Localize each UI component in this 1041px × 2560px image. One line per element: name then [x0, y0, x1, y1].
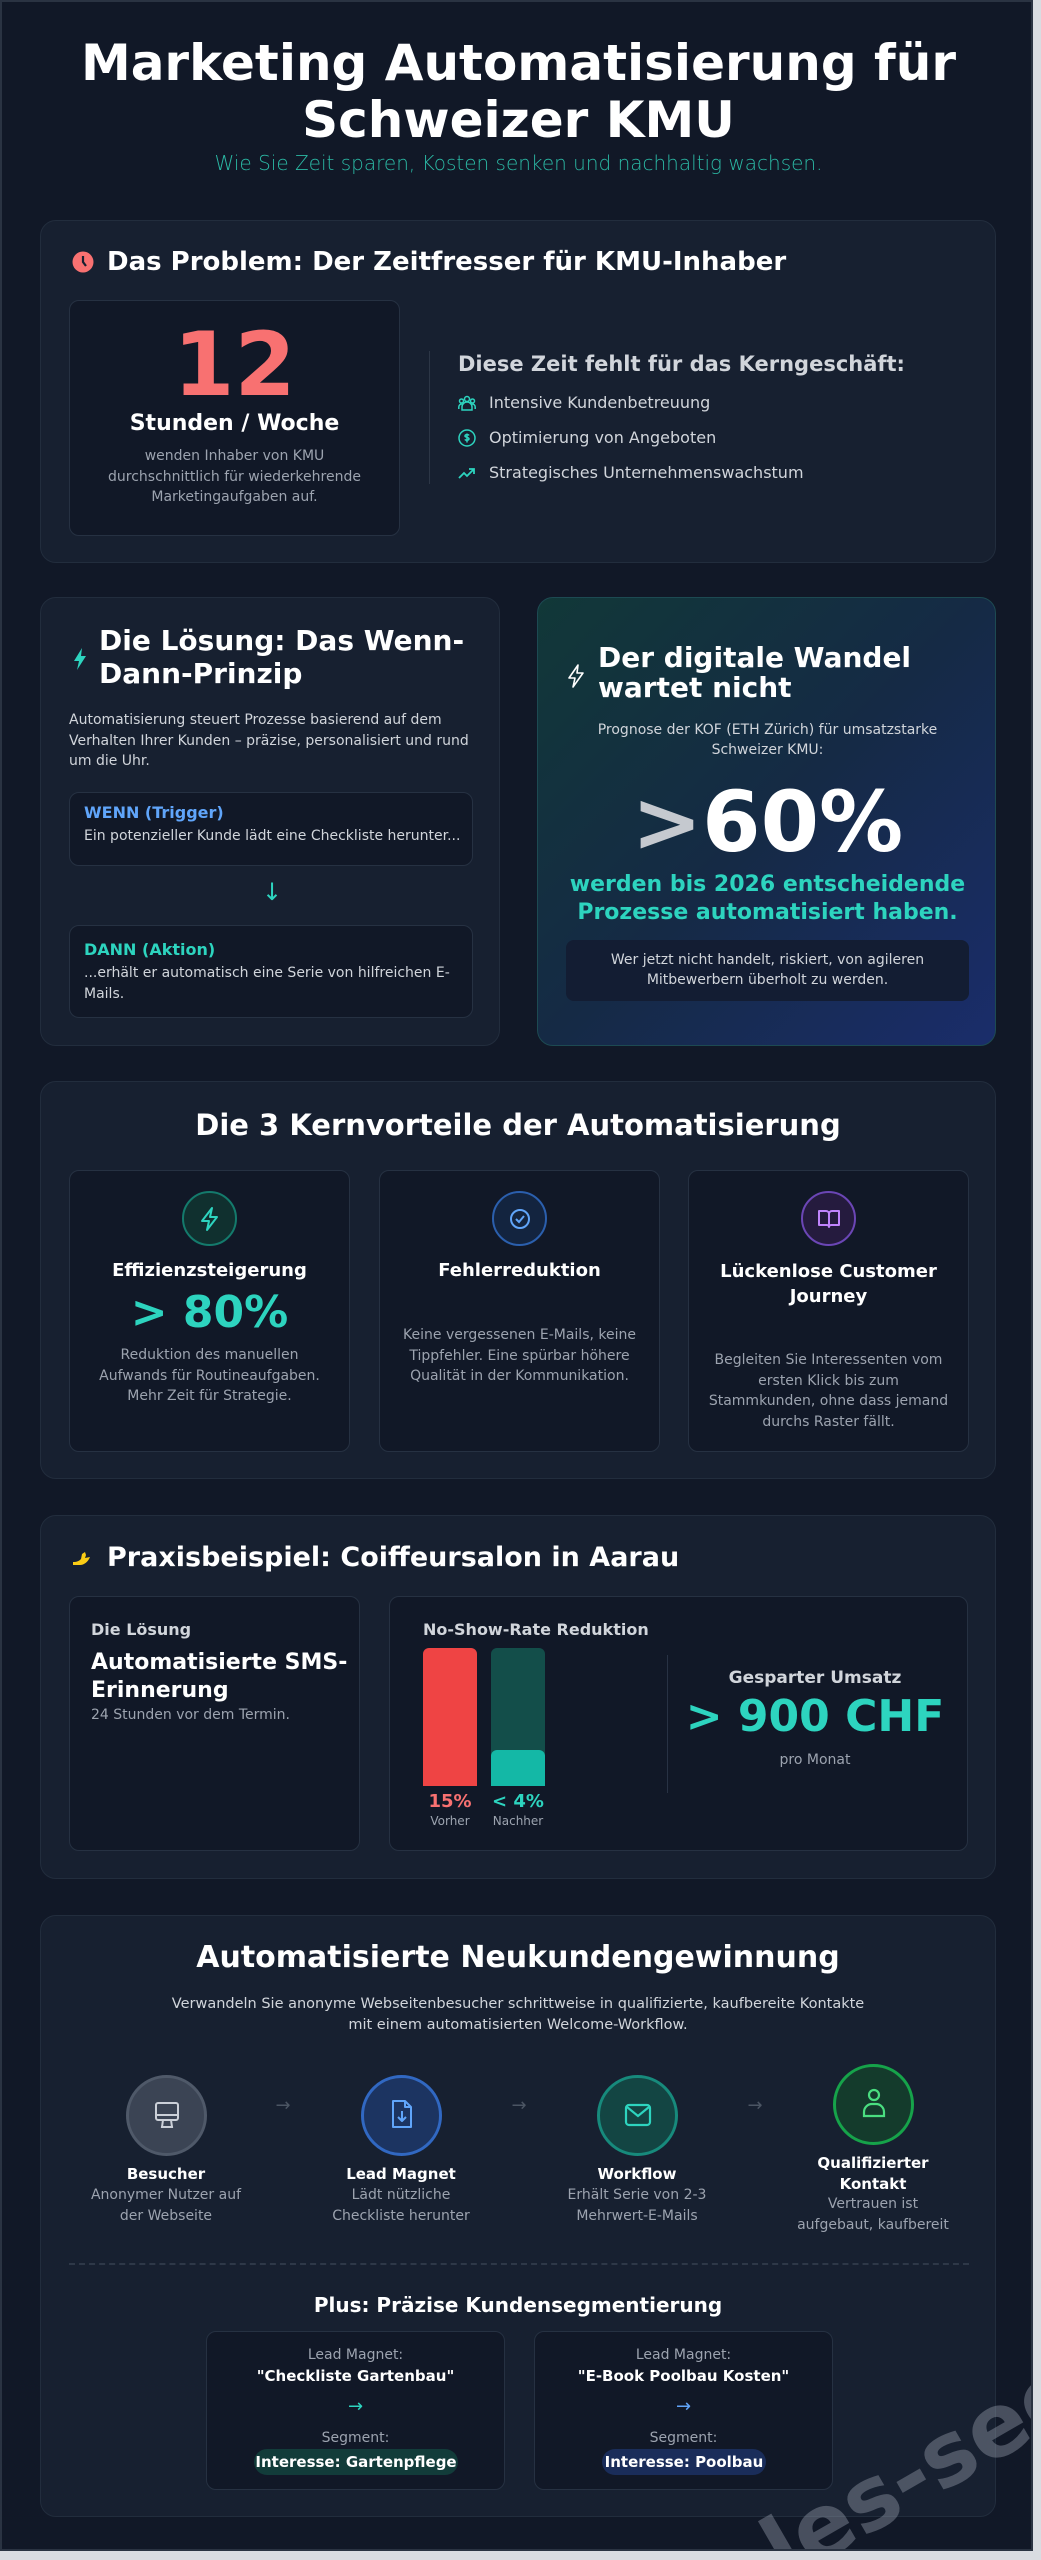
heading: solution: Die Lösung: Das Wenn-Dann-Prinzip	[99, 624, 464, 690]
box: chart and savings: No-Show-Rate Reduktion	[423, 1620, 649, 1639]
icon: check circle	[492, 1191, 547, 1246]
heading: case study: Praxisbeispiel: Coiffeursalon in Aarau	[107, 1542, 679, 1573]
arrow: →	[275, 2095, 291, 2116]
text: stat description	[570, 872, 965, 925]
icon: clock	[72, 252, 94, 272]
box: segment garden: Lead Magnet:	[308, 2347, 403, 2363]
icon: bolt	[74, 648, 86, 670]
step: lead magnet: Lead Magnet	[346, 2165, 456, 2183]
text: intro: mit einem automatisierten Welcome-Workflow.	[348, 2017, 688, 2033]
box: DANN action: DANN (Aktion)	[84, 940, 215, 959]
icon: bolt outline	[568, 664, 584, 688]
bar chart: 15%	[428, 1791, 472, 1812]
card: customer journey: Journey	[790, 1286, 867, 1307]
box: WENN trigger	[69, 792, 473, 866]
arrow: →	[747, 2095, 763, 2116]
text: forecast source: Schweizer KMU:	[712, 742, 823, 758]
box: segment garden: "Checkliste Gartenbau"	[257, 2367, 454, 2385]
card: error reduction: Tippfehler. Eine spürbar höhere	[409, 1348, 630, 1364]
text: explanation: um die Uhr.	[69, 753, 150, 769]
card: efficiency: Effizienzsteigerung	[112, 1260, 307, 1281]
panel: digital change	[537, 597, 996, 1046]
box: WENN trigger: WENN (Trigger)	[84, 803, 224, 822]
description: wenden Inhaber von KMU durchschnittlich für wiederkehrende Marketingaufgaben auf.	[108, 448, 361, 505]
box: chart and savings	[389, 1596, 968, 1851]
step: lead magnet: Checkliste herunter	[332, 2208, 470, 2224]
card: customer journey	[688, 1170, 969, 1452]
box: DANN action	[69, 925, 473, 1018]
callout: warning	[566, 940, 969, 1001]
bar chart: Nachher	[493, 1814, 543, 1828]
box: segment garden: Segment:	[322, 2430, 389, 2446]
panel: problem	[40, 220, 996, 563]
icon: bolt circle	[182, 1191, 237, 1246]
box: segment pool: Interesse: Poolbau	[605, 2453, 763, 2471]
card: error reduction: Keine vergessenen E-Mails, keine	[403, 1327, 636, 1343]
box: segment pool: "E-Book Poolbau Kosten"	[578, 2367, 789, 2385]
unit: Stunden / Woche	[130, 411, 339, 436]
card: customer journey: Stammkunden, ohne dass jemand	[709, 1393, 948, 1409]
arrow: down: ↓	[262, 878, 282, 906]
item: customer care: Intensive Kundenbetreuung	[489, 393, 710, 412]
big number: 12	[173, 313, 296, 416]
box: segment pool: Segment:	[650, 2430, 717, 2446]
stat box: 12 hours	[69, 300, 400, 536]
heading: digital change	[598, 641, 911, 704]
text: forecast source	[598, 722, 937, 758]
stat: >80%: > 80%	[131, 1287, 288, 1338]
panel: solution	[40, 597, 500, 1046]
stat: saved revenue: Gesparter Umsatz	[729, 1668, 901, 1688]
arrow: →	[511, 2095, 527, 2116]
list: lost activities	[458, 393, 804, 482]
stat: saved revenue: pro Monat	[780, 1752, 850, 1768]
text: explanation: Verhalten Ihrer Kunden – präzise, personalisiert und rund	[69, 732, 469, 748]
heading: benefits: Die 3 Kernvorteile der Automatisierung	[195, 1108, 841, 1142]
panel: lead generation	[40, 1915, 996, 2517]
step: qualified contact	[797, 2064, 949, 2233]
box: segment garden	[206, 2331, 505, 2490]
box: solution	[69, 1596, 360, 1851]
text: explanation	[69, 712, 469, 769]
stat: saved revenue	[686, 1668, 944, 1768]
panel: benefits	[40, 1081, 996, 1479]
title: Schweizer KMU	[302, 91, 735, 149]
box: segment pool: Lead Magnet:	[636, 2347, 731, 2363]
box: segment pool: →	[676, 2396, 691, 2417]
card: efficiency: Mehr Zeit für Strategie.	[127, 1388, 292, 1404]
box: solution: 24 Stunden vor dem Termin.	[91, 1707, 290, 1723]
box: solution: Automatisierte SMS-Erinnerung	[91, 1650, 347, 1703]
box: segment garden: →	[348, 2396, 363, 2417]
step: qualified contact: Vertrauen ist	[828, 2196, 918, 2212]
step: workflow: Workflow	[598, 2165, 676, 2183]
text: intro	[172, 1996, 864, 2033]
card: efficiency: Reduktion des manuellen	[121, 1347, 298, 1363]
text: stat description: werden bis 2026 entscheidende	[570, 872, 965, 897]
icon: book	[801, 1191, 856, 1246]
callout: warning: Wer jetzt nicht handelt, riskiert, von agileren	[611, 952, 924, 968]
step: lead magnet: Lädt nützliche	[352, 2187, 450, 2203]
callout: warning: Mitbewerbern überholt zu werden.	[647, 972, 888, 988]
card: error reduction	[379, 1170, 660, 1452]
step: workflow: Mehrwert-E-Mails	[576, 2208, 698, 2224]
heading: segmentation: Plus: Präzise Kundensegmentierung	[314, 2293, 722, 2317]
step: visitor	[91, 2075, 242, 2224]
title: Marketing Automatisierung für	[81, 34, 956, 92]
text: explanation: Automatisierung steuert Prozesse basierend auf dem	[69, 712, 442, 728]
bar chart: Vorher	[430, 1814, 470, 1828]
stat: saved revenue: > 900 CHF	[686, 1691, 944, 1742]
heading: digital change: Der digitale Wandel	[598, 641, 911, 674]
bar chart	[423, 1648, 545, 1828]
heading: problem: Das Problem: Der Zeitfresser für KMU-Inhaber	[107, 247, 786, 277]
box: segment garden: Interesse: Gartenpflege	[255, 2453, 457, 2471]
box: segment pool	[534, 2331, 833, 2490]
card: customer journey: Lückenlose Customer	[720, 1261, 937, 1282]
step: workflow	[568, 2075, 706, 2224]
box: DANN action: ...erhält er automatisch eine Serie von hilfreichen E-Mails.	[84, 965, 450, 1002]
step: visitor: der Webseite	[120, 2208, 212, 2224]
box: solution: Die Lösung	[91, 1620, 191, 1639]
box: WENN trigger: Ein potenzieller Kunde lädt eine Checkliste herunter...	[84, 828, 460, 844]
bar chart: < 4%	[492, 1791, 544, 1812]
item: growth: Strategisches Unternehmenswachstum	[489, 463, 804, 482]
card: error reduction: Qualität in der Kommunikation.	[410, 1368, 629, 1384]
step: visitor: Anonymer Nutzer auf	[91, 2187, 241, 2203]
step: qualified contact: Kontakt	[840, 2175, 906, 2193]
heading: lead generation: Automatisierte Neukundengewinnung	[196, 1940, 840, 1975]
step: qualified contact: aufgebaut, kaufbereit	[797, 2217, 949, 2233]
card: customer journey: durchs Raster fällt.	[762, 1414, 895, 1430]
heading: digital change: wartet nicht	[598, 671, 792, 704]
step: lead magnet	[332, 2075, 470, 2224]
big stat: >60%: >60%	[632, 773, 903, 871]
panel: case study	[40, 1515, 996, 1879]
subtitle: Wie Sie Zeit sparen, Kosten senken und nachhaltig wachsen.	[215, 151, 822, 175]
card: customer journey: Begleiten Sie Interessenten vom	[715, 1352, 942, 1368]
step: visitor: Besucher	[127, 2165, 205, 2183]
step: qualified contact: Qualifizierter	[817, 2154, 929, 2172]
text: stat description: Prozesse automatisiert haben.	[577, 900, 958, 925]
step: workflow: Erhält Serie von 2-3	[568, 2187, 706, 2203]
icon: hand	[73, 1552, 90, 1565]
item: offers: Optimierung von Angeboten	[489, 428, 716, 447]
heading: core business: Diese Zeit fehlt für das Kerngeschäft:	[458, 352, 905, 376]
text: forecast source: Prognose der KOF (ETH Zürich) für umsatzstarke	[598, 722, 937, 738]
card: customer journey: ersten Klick bis zum	[758, 1373, 899, 1389]
card: efficiency	[69, 1170, 350, 1452]
text: intro: Verwandeln Sie anonyme Webseitenbesucher schrittweise in qualifizierte, kaufbereite Kontakte	[172, 1996, 864, 2012]
title	[81, 34, 956, 149]
card: efficiency: Aufwands für Routineaufgaben.	[99, 1368, 320, 1384]
card: error reduction: Fehlerreduktion	[438, 1260, 601, 1281]
